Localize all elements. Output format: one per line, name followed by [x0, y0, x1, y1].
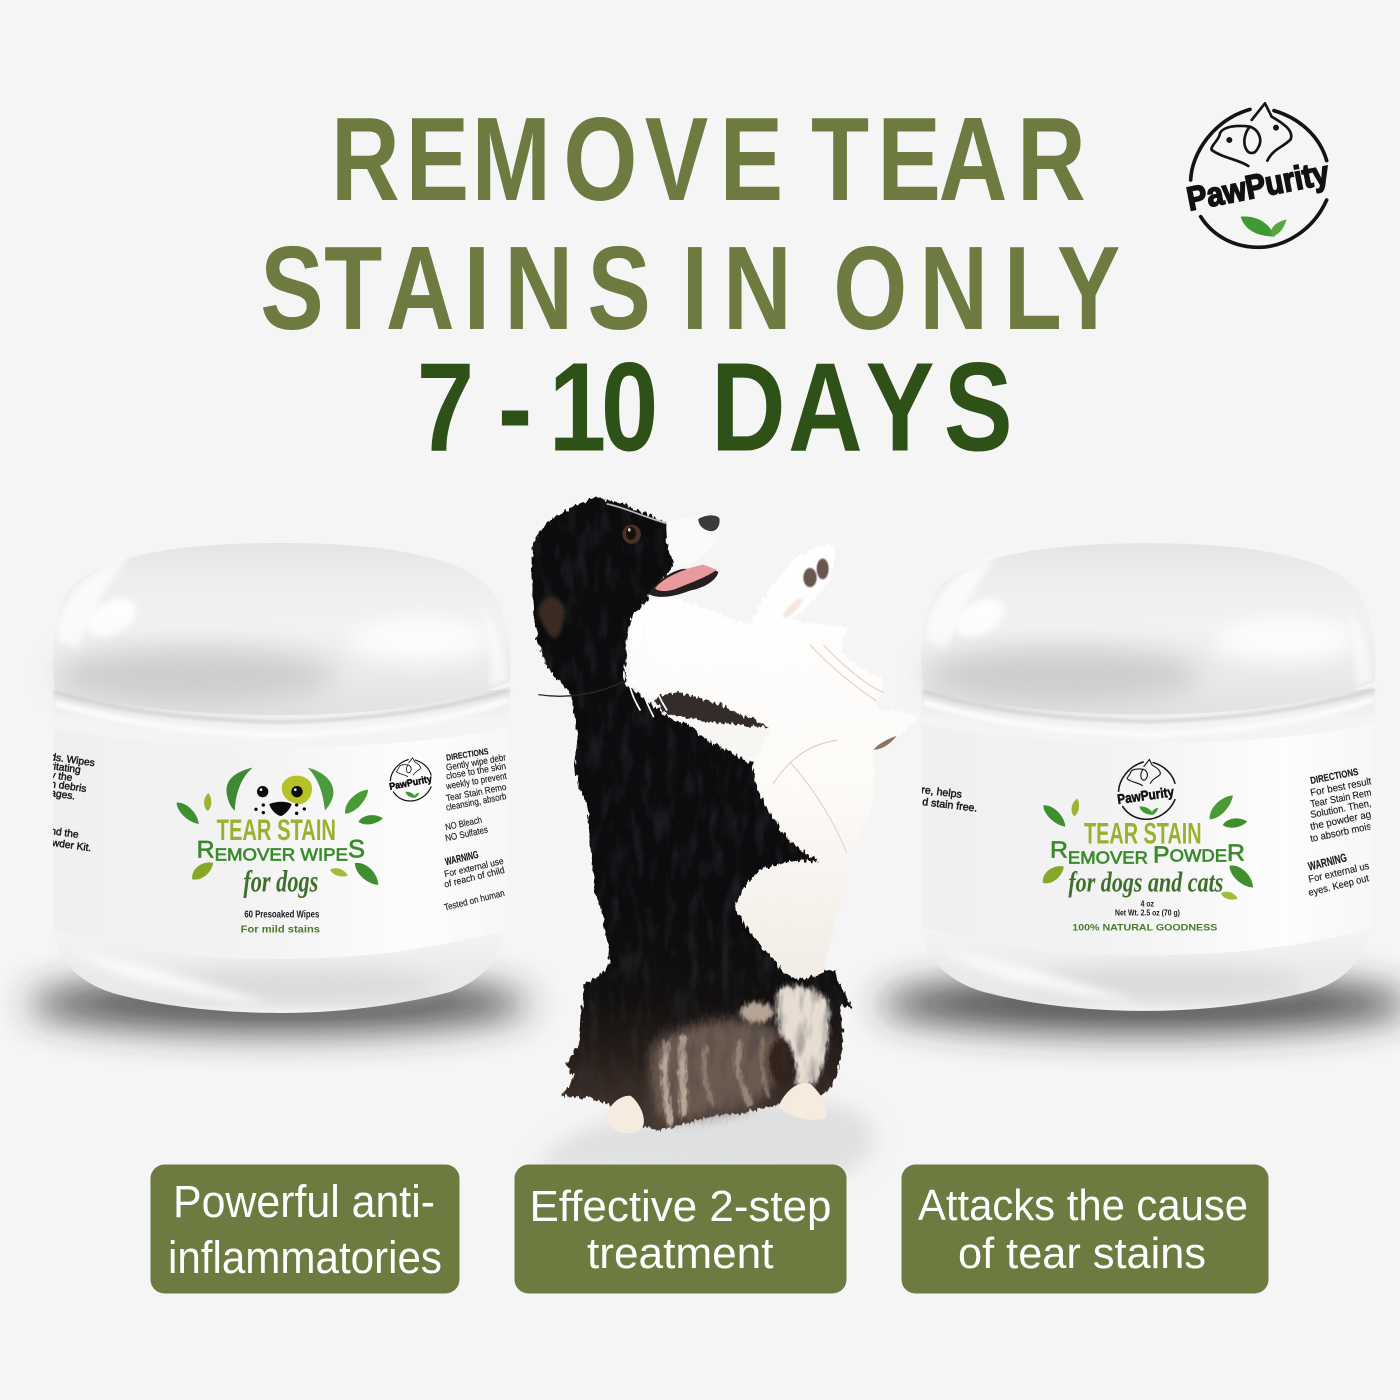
label side text: owder Kit. — [46, 837, 92, 854]
for dogs and cats script: for dogs and cats — [1068, 868, 1223, 899]
label side text: ritating — [50, 761, 82, 776]
label side text: nd the — [50, 826, 79, 841]
photo: border collie dog — [532, 497, 918, 1133]
jar lid — [921, 543, 1375, 714]
jar shape — [921, 543, 1375, 1011]
callout: attacks the cause of tear stains: of tear stains — [958, 1229, 1206, 1278]
label side text: d stain free. — [922, 796, 978, 815]
belly dark patch — [769, 1039, 791, 1083]
callout: effective 2-step treatment: Effective 2-step — [530, 1182, 832, 1231]
icon: leaves — [173, 785, 383, 889]
directions block: WARNING — [444, 849, 480, 868]
front right paw — [778, 1083, 826, 1120]
jar: wipes — [46, 543, 510, 1013]
jar lower shade — [160, 969, 440, 1001]
jar lid — [53, 543, 510, 715]
raised paw shading — [783, 597, 803, 618]
fur sheen — [532, 497, 853, 1130]
logo wordmark: PawPurity — [1184, 155, 1333, 219]
title — [260, 92, 1120, 478]
directions block: weekly to prevent — [444, 771, 508, 791]
icon: leaves — [1241, 216, 1287, 237]
directions block: WARNING — [1307, 850, 1348, 874]
jar label — [922, 723, 1374, 955]
directions block — [1307, 767, 1373, 899]
product name: remover powder: R — [1227, 839, 1245, 865]
directions block: to absorb mois — [1309, 821, 1372, 845]
dog muzzle — [666, 515, 720, 569]
directions block: of reach of child — [443, 865, 506, 890]
dog black body — [532, 497, 853, 1130]
front left paw — [605, 1096, 644, 1133]
directions block: Solution. Then, — [1309, 798, 1372, 821]
lid highlights — [55, 556, 507, 703]
dog eye — [622, 525, 641, 544]
white ruff hairs — [627, 619, 667, 716]
size line: 4 oz — [1141, 900, 1154, 909]
directions block: For best result — [1309, 776, 1373, 799]
stray neck hair — [538, 682, 623, 696]
mini logo ring — [390, 758, 431, 801]
belly tan strands — [665, 1039, 768, 1122]
label side text: re, helps — [921, 784, 962, 801]
directions block: Tear Stain Remo — [445, 782, 507, 803]
jar neck ridges — [924, 690, 1374, 734]
callout: effective 2-step treatment — [514, 1164, 846, 1294]
white arm feather — [683, 716, 770, 758]
product name: remover wipes: R — [197, 836, 215, 863]
icon: dog and cat heads — [1211, 103, 1291, 166]
jar body — [922, 690, 1375, 1011]
directions block: Gently wipe debr — [445, 752, 507, 773]
lid highlights — [924, 556, 1372, 702]
natural goodness line: 100% NATURAL GOODNESS — [1072, 922, 1217, 932]
belly cream fur — [776, 986, 829, 1085]
dark fur wedge — [653, 693, 770, 728]
directions block: NO Bleach — [444, 815, 483, 832]
directions block: Tested on human — [443, 888, 506, 913]
mini logo — [1116, 760, 1175, 819]
logo ring — [1191, 109, 1327, 247]
arm feather lines — [773, 645, 883, 853]
net weight line: Net Wt. 2.5 oz (70 g) — [1115, 908, 1180, 918]
directions block: DIRECTIONS — [445, 746, 489, 763]
head blaze — [607, 504, 667, 523]
title line: remove tear: REMOVE TEAR — [331, 92, 1086, 225]
callout: powerful anti-inflammatories: inflammatories — [168, 1232, 442, 1283]
raised paw pads — [803, 558, 829, 587]
product name: remover powder: OWDE — [1170, 846, 1227, 866]
callout: attacks the cause of tear stains: Attacks the cause — [918, 1181, 1248, 1230]
directions block: Tear Stain Rem — [1309, 788, 1372, 810]
dog tongue — [655, 565, 717, 591]
jar bottom highlight — [938, 948, 1137, 1003]
product name: remover powder: P — [1153, 842, 1170, 868]
mini logo ring — [1119, 760, 1175, 819]
label side text — [922, 787, 976, 812]
ear brown fur — [538, 597, 565, 638]
dog white fur — [630, 543, 918, 987]
dog furry body — [532, 497, 918, 1130]
directions block: DIRECTIONS — [1309, 767, 1360, 787]
label side text: n debris — [50, 779, 87, 795]
directions block: eyes. Keep out — [1307, 873, 1370, 899]
directions block: close to the skin — [445, 761, 507, 781]
jar body — [53, 690, 510, 1013]
label artwork: powder — [1039, 760, 1373, 932]
directions block: the powder ag — [1309, 809, 1372, 833]
logo: PawPurity — [1184, 103, 1333, 247]
mini logo — [388, 758, 433, 801]
callout: powerful anti-inflammatories — [150, 1164, 460, 1294]
usage line: For mild stains — [241, 924, 320, 935]
jar: powder — [921, 543, 1375, 1011]
mini logo wordmark: PawPurity — [388, 774, 433, 793]
directions block: NO Sulfates — [444, 824, 489, 843]
mini logo wordmark: PawPurity — [1116, 783, 1175, 807]
product name: remover powder: EMOVER — [1068, 847, 1153, 867]
product name: tear stain: TEAR STAIN — [1084, 817, 1202, 850]
label artwork: wipes — [173, 746, 508, 935]
callout: powerful anti-inflammatories: Powerful anti- — [173, 1176, 435, 1227]
title line: stains in only: STAINS IN ONLY — [260, 221, 1120, 354]
label side text: y the — [50, 770, 73, 784]
label side text — [53, 753, 95, 852]
icon: dog face — [226, 768, 333, 816]
shadow: left jar — [28, 976, 528, 1032]
lower arm paw pad — [873, 736, 897, 750]
for dogs script: for dogs — [243, 865, 318, 899]
jar label — [53, 727, 509, 959]
product name: remover wipes: S — [348, 836, 365, 863]
product name: tear stain: TEAR STAIN — [217, 814, 336, 847]
belly brown fur — [650, 1020, 780, 1119]
chest tan tuft — [740, 1002, 773, 1023]
label side text: ages. — [50, 788, 76, 802]
icon: leaves — [1039, 791, 1257, 902]
dog nose — [698, 515, 720, 531]
jar lower shade — [1028, 967, 1305, 999]
callout: attacks the cause of tear stains — [902, 1164, 1268, 1294]
directions block: For external use — [443, 856, 505, 879]
product name: remover powder: R — [1050, 837, 1068, 863]
dog mouth — [648, 568, 718, 597]
label side text: ds. Wipes — [50, 752, 95, 769]
product name: remover wipes: EMOVER WIPE — [215, 844, 348, 864]
jar bottom highlight — [99, 960, 254, 1003]
count line: 60 Presoaked Wipes — [244, 909, 320, 920]
shadow: dog floor — [535, 1097, 874, 1175]
directions block: cleansing, absorb — [445, 791, 507, 813]
jar neck ridges — [55, 690, 509, 735]
directions block — [443, 746, 508, 913]
mini logo leaves — [405, 792, 419, 798]
shadow: right jar — [879, 976, 1400, 1032]
callout: effective 2-step treatment: treatment — [587, 1229, 774, 1278]
mini logo leaves — [1139, 806, 1158, 815]
title line: 7-10 days: 7-10 DAYS — [417, 338, 1013, 478]
directions block: For external us — [1308, 861, 1370, 886]
